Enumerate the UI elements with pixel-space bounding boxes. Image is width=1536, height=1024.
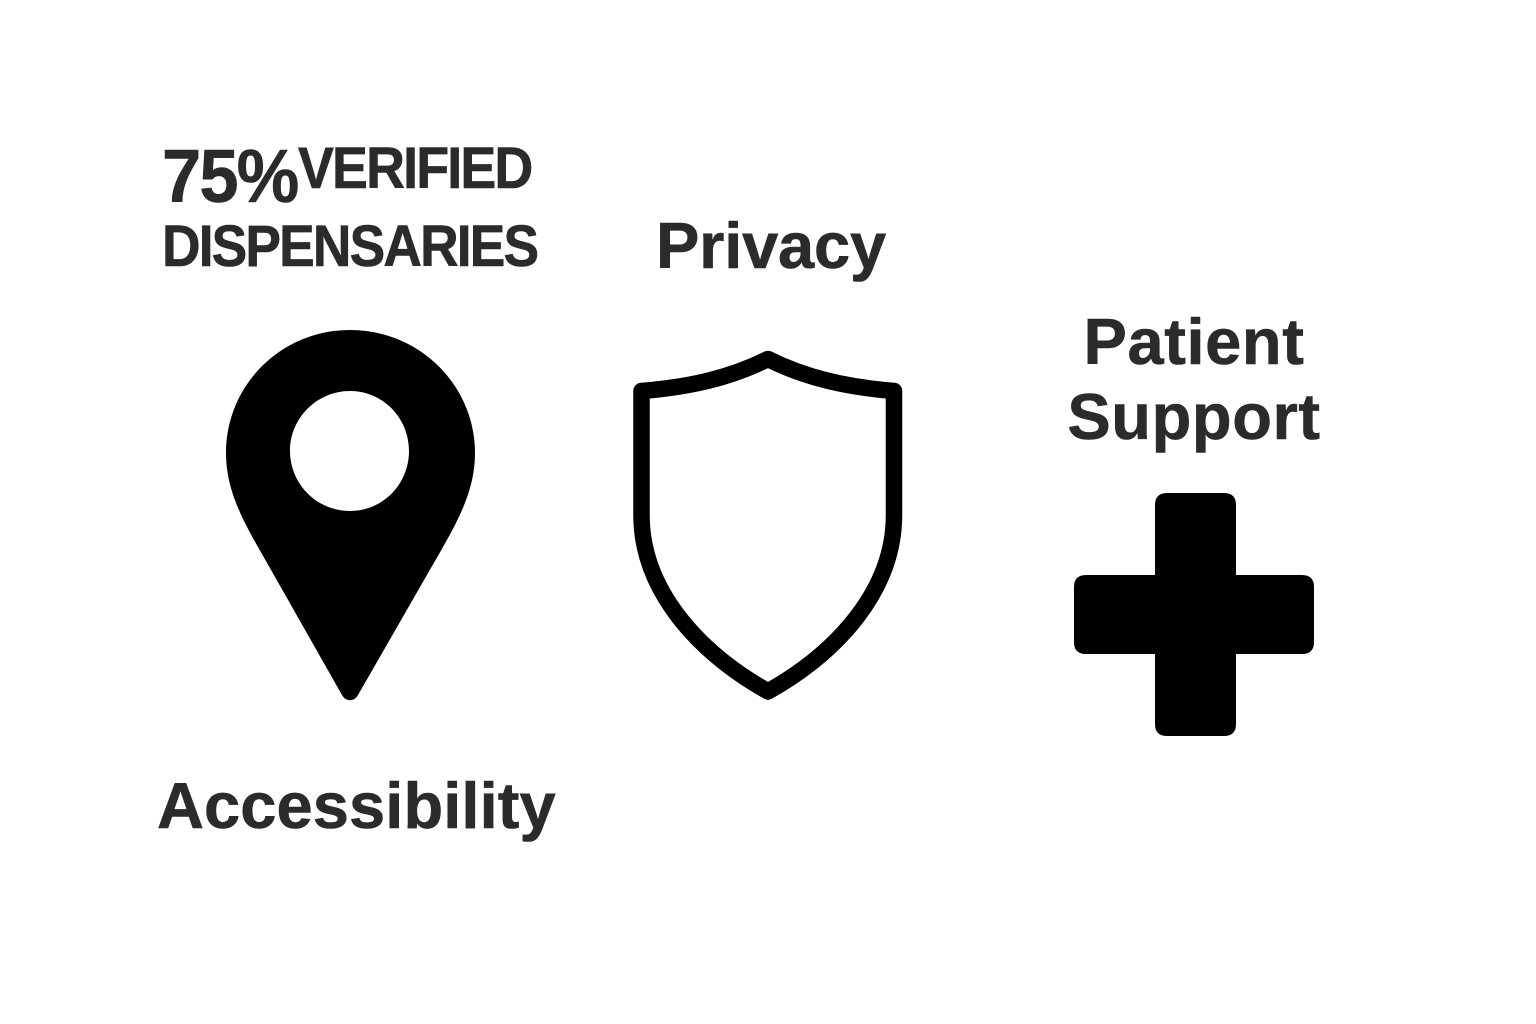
icon: shield xyxy=(642,359,894,692)
stat: 75%: 75% xyxy=(162,134,297,218)
icon: medical cross xyxy=(1074,493,1314,736)
heading: patient support: Patient xyxy=(1084,305,1304,378)
heading: patient support xyxy=(1067,305,1321,453)
heading: privacy: Privacy xyxy=(656,209,886,282)
heading: verified dispensaries line 2: DISPENSARIES xyxy=(162,214,537,278)
heading: verified dispensaries line 1: VERIFIED xyxy=(298,136,531,201)
heading: accessibility: Accessibility xyxy=(157,769,556,842)
icon: location pin xyxy=(226,330,475,700)
heading: patient support: Support xyxy=(1067,380,1321,453)
